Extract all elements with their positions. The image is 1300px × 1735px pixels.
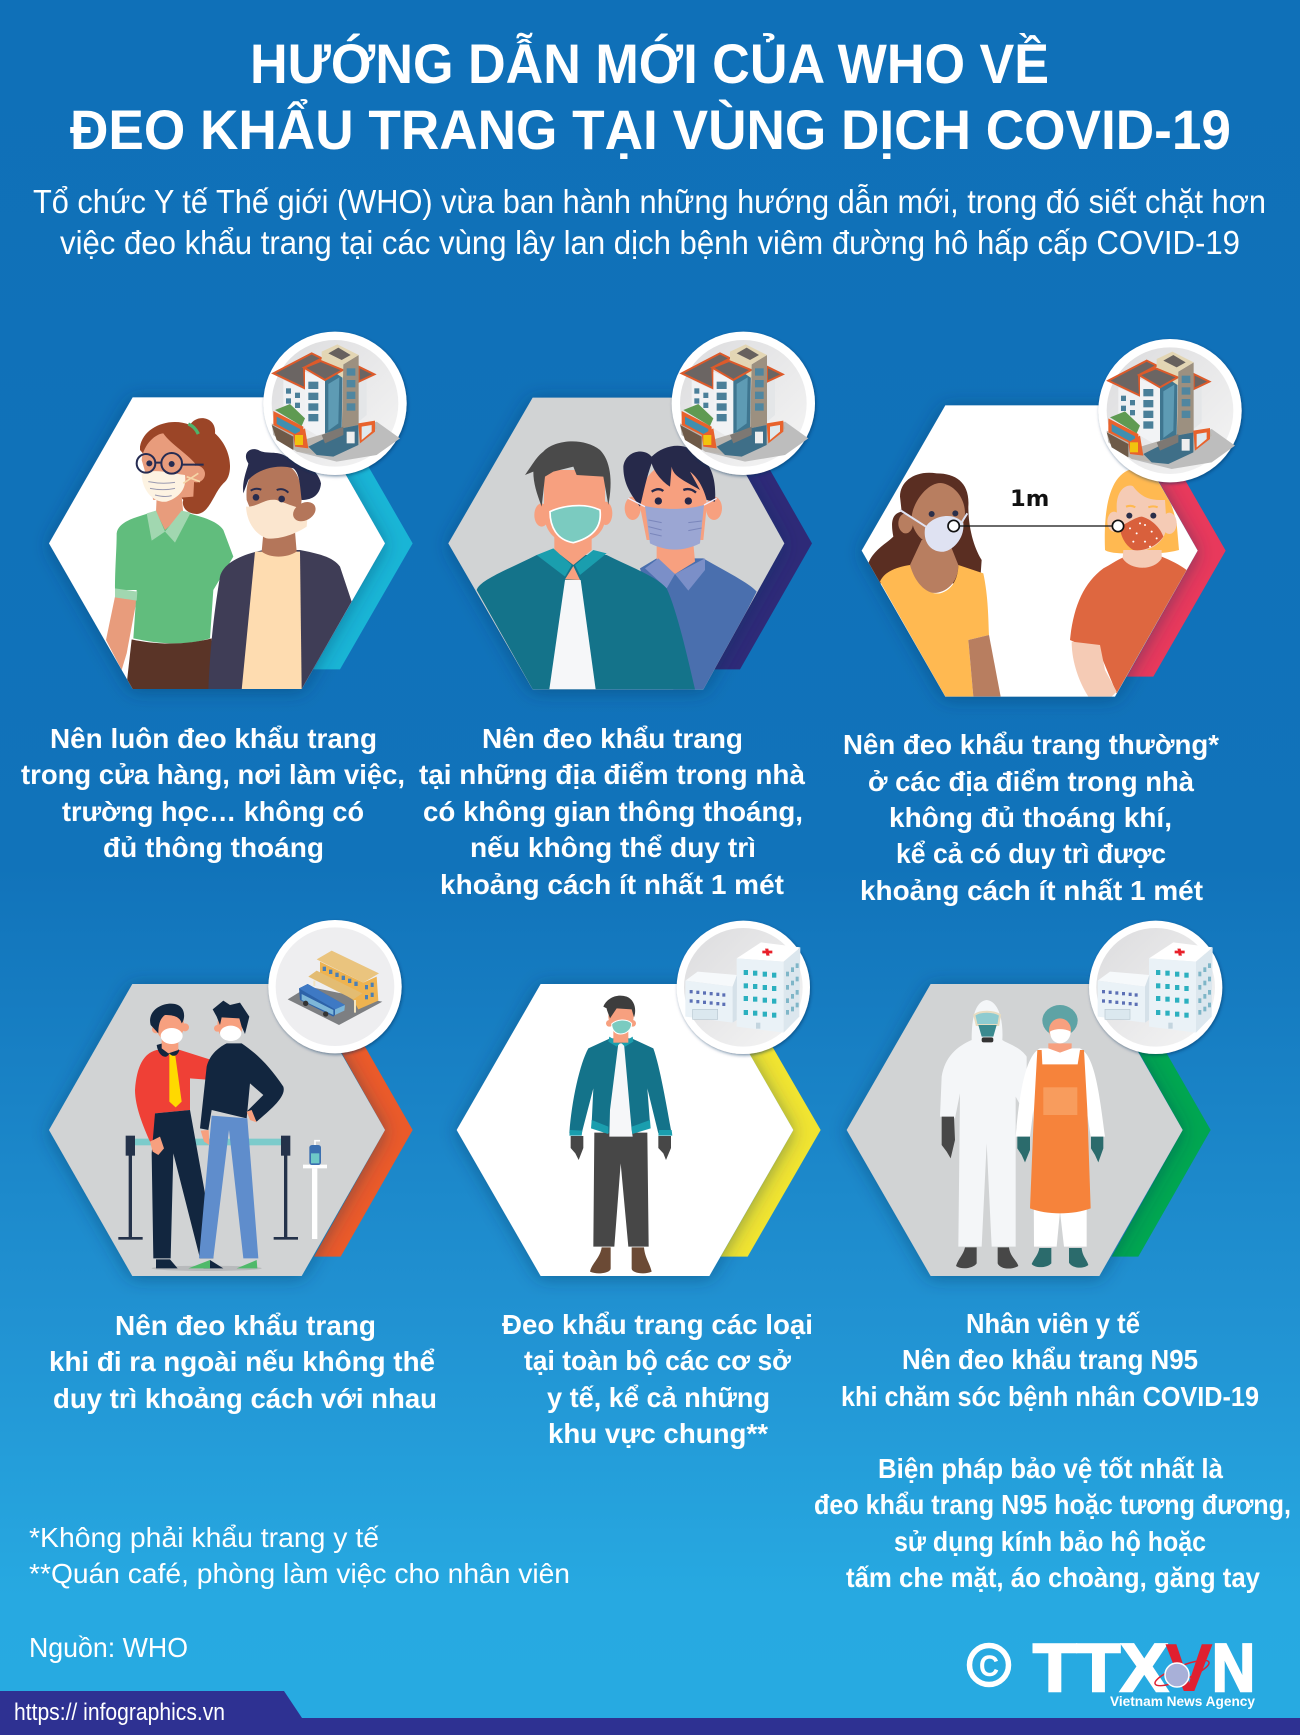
illustration: two men wearing masks [477,441,757,689]
text: panel 6: Nhân viên y tế [966,1308,1141,1339]
illustration: stanchions and hand sanitizer [118,1136,327,1271]
text: panel 3: khoảng cách ít nhất 1 mét [860,875,1203,906]
text: panel 2: khoảng cách ít nhất 1 mét [440,869,784,900]
text: panel 3 [843,729,1219,906]
illustration: two men in masks [135,1001,284,1268]
hexagon background [847,984,1183,1276]
illustration: two women one metre apart: 1m [1010,487,1049,512]
icon: school and bus [268,920,402,1053]
intro text: việc đeo khẩu trang tại các vùng lây lan dịch bệnh viêm đường hô hấp cấp COVID-19 [60,224,1240,261]
text: panel 4: Nên đeo khẩu trang [115,1310,376,1341]
title: HƯỚNG DẪN MỚI CỦA WHO VỀ [250,32,1049,95]
logo: TTXVN: N [1212,1630,1255,1706]
icon: apartment building [1098,339,1242,482]
panel: poorly ventilated indoor [862,339,1242,697]
text: panel 5: tại toàn bộ các cơ sở [524,1345,791,1376]
text: panel 5 [502,1309,813,1449]
text: panel 1: đủ thông thoáng [103,832,324,863]
text: panel 3: kể cả có duy trì được [896,838,1166,869]
text: panel 6: Biện pháp bảo vệ tốt nhất là [878,1453,1224,1484]
text: panel 6: Nên đeo khẩu trang N95 [902,1344,1198,1375]
hexagon background [49,984,385,1276]
chevron: green [1112,1004,1211,1257]
text: panel 3: ở các địa điểm trong nhà [868,766,1195,797]
logo: TTXVN: V [1165,1630,1213,1706]
text: panel 6 [814,1308,1291,1593]
text: panel 5: khu vực chung** [548,1418,768,1449]
panel: shops and workplaces [49,332,413,690]
chevron: cyan [313,417,413,669]
chevron: yellow [721,1004,821,1257]
source: Nguồn: WHO [29,1632,188,1663]
text: panel 4: khi đi ra ngoài nếu không thể [49,1346,435,1377]
icon: apartment building [672,332,815,475]
footnotes: *Không phải khẩu trang y tế [29,1522,379,1553]
text: panel 1: Nên luôn đeo khẩu trang [50,723,377,754]
text: panel 4: duy trì khoảng cách với nhau [53,1383,437,1414]
footer bar: https:// infographics.vn [14,1699,225,1726]
text: panel 4 [49,1310,437,1414]
text: panel 5: Đeo khẩu trang các loại [502,1309,813,1340]
logo: TTXVN: Vietnam News Agency [1110,1693,1255,1709]
icon: hospital [677,921,810,1054]
hexagon background [862,405,1198,697]
logo: TTXVN: C [979,1650,999,1683]
footnotes: **Quán café, phòng làm việc cho nhân viên [29,1558,570,1589]
illustration: man wearing jacket and mask [569,996,672,1273]
text: panel 3: Nên đeo khẩu trang thường* [843,729,1219,760]
illustration: two women one metre apart [868,468,1187,697]
illustration: nurse in orange apron [1016,1005,1105,1268]
panel: indoor with ventilation [448,332,815,689]
text: panel 1: trường học… không có [62,796,364,827]
text: panel 6: khi chăm sóc bệnh nhân COVID-19 [841,1381,1259,1412]
footnotes [29,1522,570,1589]
text: panel 2 [419,723,806,900]
text: panel 6: sử dụng kính bảo hộ hoặc [894,1526,1206,1557]
chevron: crimson [1127,425,1226,677]
text: panel 2: có không gian thông thoáng, [423,796,803,827]
illustration: woman and man wearing masks [106,418,352,690]
text: panel 1: trong cửa hàng, nơi làm việc, [21,759,405,790]
text: panel 2: nếu không thể duy trì [470,832,756,863]
text: panel 3: không đủ thoáng khí, [889,802,1172,833]
title: ĐEO KHẨU TRANG TẠI VÙNG DỊCH COVID-19 [70,98,1231,161]
icon: apartment building [263,332,407,475]
text: panel 5: y tế, kể cả những [547,1382,770,1413]
panel: health facilities [457,921,821,1276]
hexagon background [448,398,784,689]
hexagon background [457,984,793,1276]
icon: hospital [1089,921,1222,1054]
hexagon background [49,397,385,689]
chevron: orange [314,1004,413,1257]
logo: TTXVN: TTX [1033,1630,1168,1706]
text: panel 1 [21,723,405,863]
title [70,32,1231,161]
text: panel 6: tấm che mặt, áo choàng, găng tay [846,1562,1261,1593]
logo: TTXVN [970,1630,1255,1709]
panel: medical staff [847,921,1222,1276]
text: panel 2: Nên đeo khẩu trang [482,723,743,754]
footer bar [0,1691,1300,1735]
panel: outdoors [49,920,413,1276]
text: panel 2: tại những địa điểm trong nhà [419,759,806,790]
chevron: navy [713,417,812,669]
intro text [33,183,1266,261]
illustration: protective suit worker [940,1000,1027,1269]
